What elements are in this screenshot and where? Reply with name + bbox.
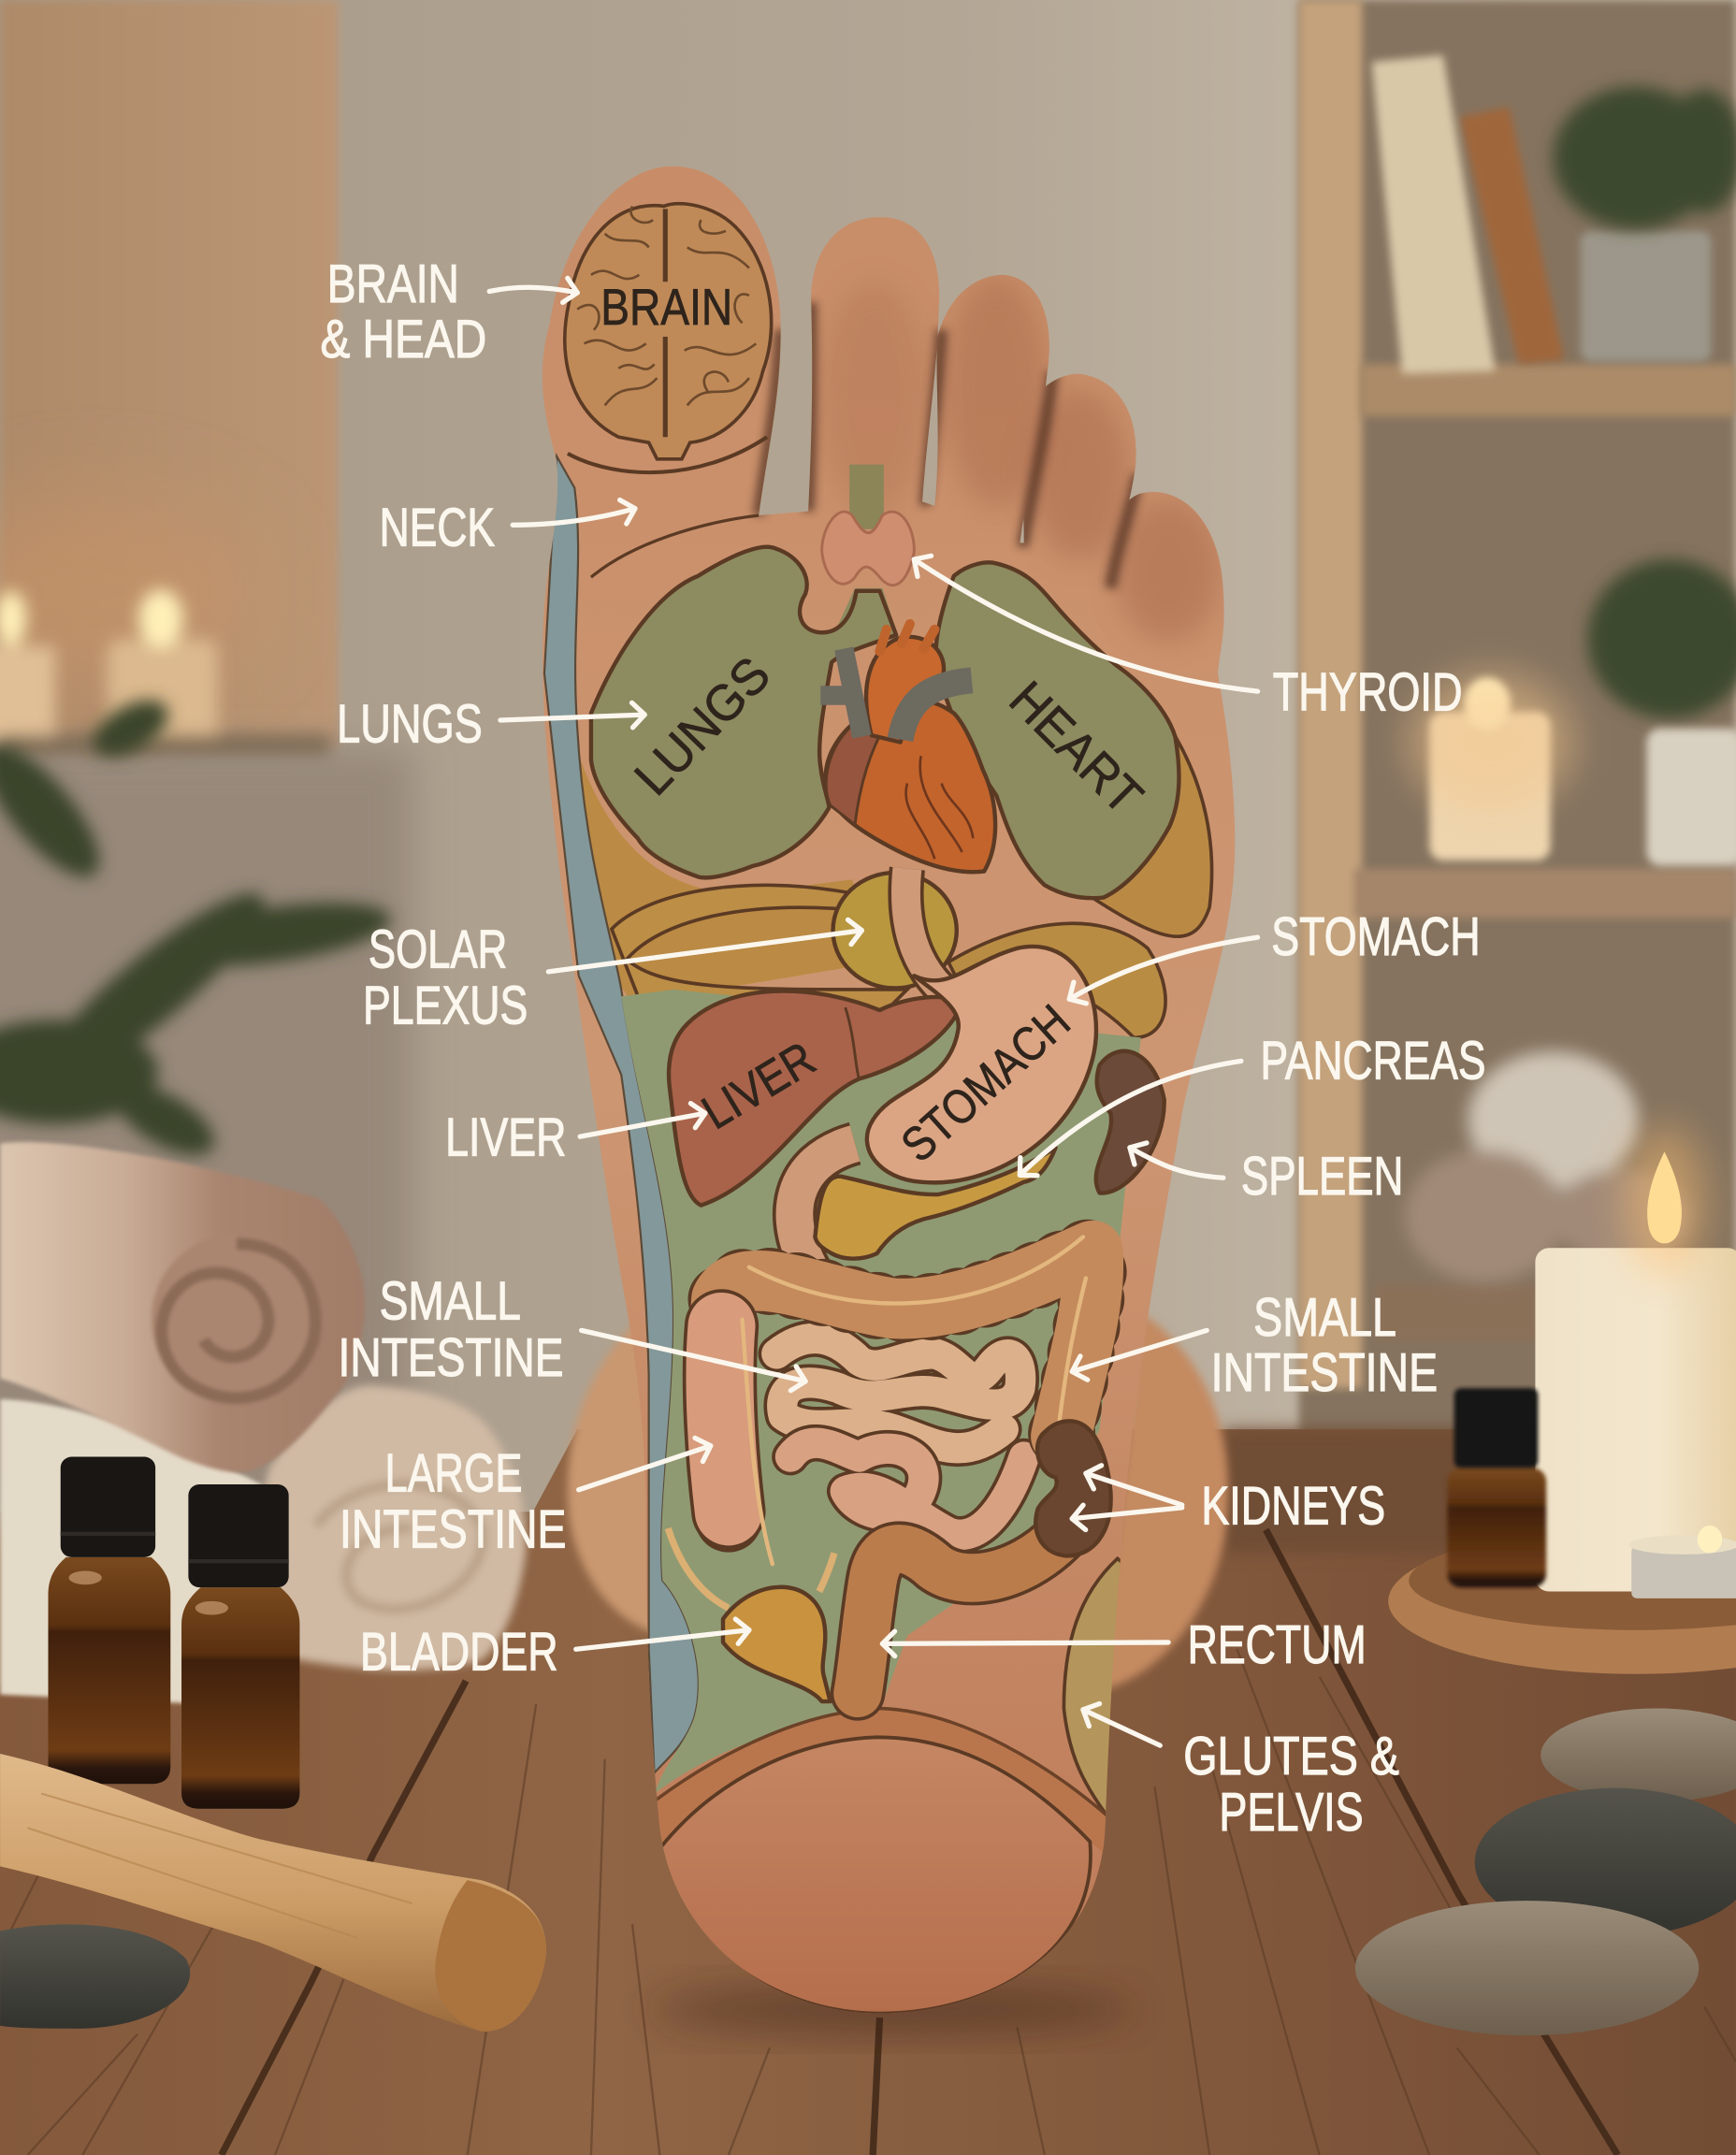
heel band	[652, 1708, 1113, 1856]
callout label: spleen	[1130, 1147, 1403, 1207]
brain label: BRAIN	[600, 279, 732, 336]
left wall candles	[0, 589, 330, 755]
callout label: brain and head: & HEAD	[320, 310, 486, 369]
toe crease lines	[568, 437, 767, 577]
esophagus	[905, 869, 955, 1001]
solar plexus	[833, 873, 957, 988]
organ: pancreas	[815, 1148, 1056, 1259]
callout label: brain and head: BRAIN	[327, 254, 459, 314]
ascending colon	[719, 1326, 729, 1511]
liver label: LIVER	[692, 1031, 824, 1139]
organ: trachea and thyroid	[822, 465, 914, 639]
wooden table	[0, 1429, 1736, 2155]
callout label: small intestine left: INTESTINE	[339, 1328, 564, 1388]
organ: brain	[565, 204, 772, 459]
right shelving with books and plants	[1299, 0, 1736, 1511]
callout label: small intestine right	[1072, 1288, 1438, 1403]
bottle 1	[49, 1457, 170, 1784]
callout label: solar plexus: PLEXUS	[363, 976, 528, 1036]
brown towel roll	[0, 1142, 365, 1472]
beige towel roll	[220, 1385, 526, 1670]
liver lobe line	[846, 1007, 859, 1078]
callout label: pancreas: PANCREAS	[1261, 1031, 1485, 1091]
callout label: solar plexus	[363, 919, 861, 1036]
callout label: liver: LIVER	[445, 1108, 566, 1168]
callout label: pancreas	[1020, 1031, 1485, 1175]
rolled towels	[0, 1142, 526, 1704]
callout label: large intestine	[340, 1443, 711, 1560]
organ: duodenum	[794, 1144, 855, 1271]
orange zones	[580, 759, 854, 995]
esophagus fill	[905, 869, 955, 1001]
callout label: neck: NECK	[380, 498, 495, 557]
foot shape	[542, 166, 1235, 2014]
callout label: glutes and pelvis: PELVIS	[1219, 1783, 1364, 1843]
stones	[0, 1708, 1736, 2035]
glutes zone	[1063, 1558, 1127, 1817]
essential oil bottles	[49, 1457, 299, 1809]
foot shadow on table	[653, 1985, 1134, 2034]
left blurred plant	[0, 688, 395, 1169]
callout label: glutes and pelvis: GLUTES &	[1183, 1727, 1399, 1786]
callout label: large intestine: LARGE	[385, 1443, 522, 1503]
callout label: small intestine right: SMALL	[1253, 1288, 1396, 1348]
callout label: thyroid	[914, 559, 1463, 723]
callout label: rectum: RECTUM	[1188, 1615, 1367, 1675]
green zone	[621, 990, 1141, 1794]
organ: liver	[669, 991, 962, 1206]
organ: small intestine	[776, 1338, 1024, 1535]
callout label: stomach: STOMACH	[1271, 907, 1481, 967]
organ: large intestine	[719, 1237, 1093, 1564]
callout label: bladder	[360, 1622, 749, 1682]
blue zone	[544, 456, 699, 1773]
callout label: solar plexus: SOLAR	[369, 919, 507, 979]
organ: spleen	[1096, 1051, 1165, 1193]
blurred spa room background	[0, 0, 1736, 1519]
heel pad	[659, 1737, 1091, 2014]
toe and sole shaded zones	[544, 275, 1221, 2014]
colon scalloped edge	[719, 1251, 1093, 1519]
callout label: brain and head	[320, 254, 577, 369]
ascending colon fill	[719, 1326, 729, 1511]
heart label: HEART	[999, 671, 1153, 825]
white towel	[0, 1399, 264, 1704]
right candle set with tray	[1388, 1127, 1736, 1674]
organ: stomach	[867, 947, 1096, 1182]
organ: bladder and ureters	[668, 1528, 834, 1701]
foot sole	[542, 166, 1235, 2014]
callout label: kidneys: KIDNEYS	[1201, 1477, 1385, 1537]
wooden massage tool	[0, 1754, 546, 2032]
callout label: thyroid: THYROID	[1273, 663, 1463, 723]
heel ankle behind the foot	[568, 1306, 1228, 1690]
duodenum fill	[794, 1144, 855, 1271]
callout label: glutes and pelvis	[1083, 1710, 1399, 1843]
colon highlight lines	[743, 1237, 1086, 1564]
callout label: lungs: LUNGS	[337, 694, 483, 754]
callout label: spleen: SPLEEN	[1241, 1147, 1403, 1207]
callout label: lungs	[337, 694, 644, 754]
callout label: large intestine: INTESTINE	[340, 1500, 566, 1560]
organ: kidneys	[1035, 1421, 1111, 1555]
callout label: neck	[380, 498, 635, 557]
bottle 2	[181, 1484, 299, 1809]
organ: right lung	[936, 562, 1179, 898]
lungs label: LUNGS	[624, 646, 781, 806]
organ: heart	[820, 624, 995, 872]
callout label: liver	[445, 1108, 705, 1168]
organ: descending colon and rectum	[858, 1537, 1061, 1693]
callout label: small intestine right: INTESTINE	[1211, 1343, 1438, 1403]
organ: left lung	[591, 547, 896, 877]
callout label: bladder: BLADDER	[360, 1622, 558, 1682]
callout label: small intestine left	[339, 1272, 805, 1388]
callout label: stomach	[1069, 907, 1481, 999]
heel band top line	[652, 1708, 1113, 1821]
callout label: kidneys	[1072, 1473, 1385, 1537]
stomach label: STOMACH	[890, 993, 1080, 1172]
callout label: small intestine left: SMALL	[380, 1272, 521, 1332]
colon body	[719, 1251, 1093, 1519]
